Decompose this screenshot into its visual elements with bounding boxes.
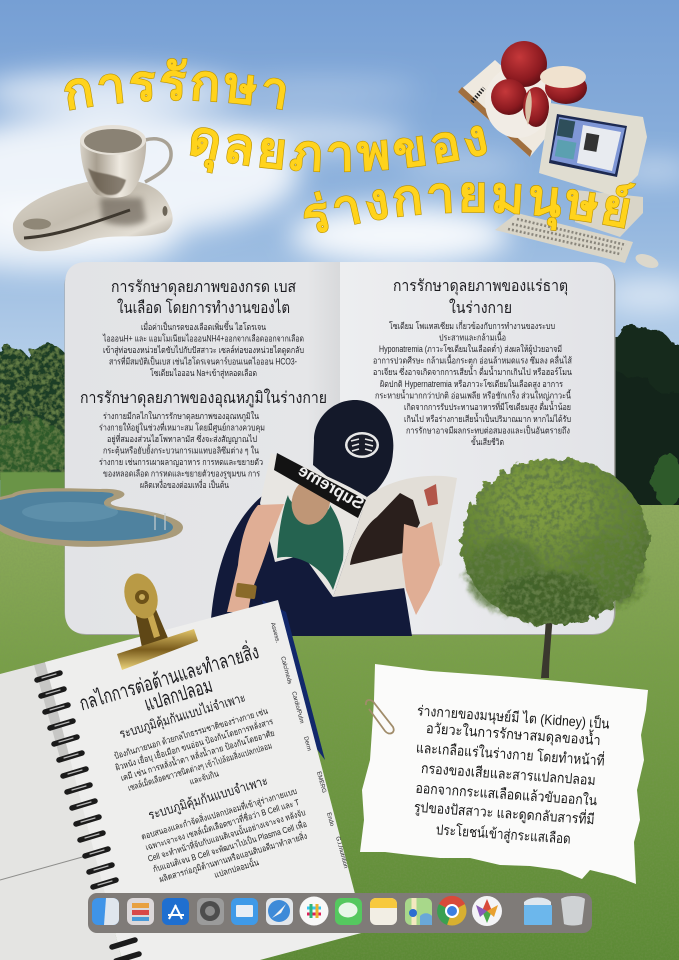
torn note card — [360, 664, 648, 884]
icon: settings — [197, 898, 224, 925]
icon: messages — [335, 898, 362, 925]
notebook tabs: Assess. — [269, 622, 280, 644]
spiral binding — [37, 673, 139, 960]
magazine left page: Supreme — [295, 461, 368, 513]
cap — [313, 400, 393, 503]
icon: slack — [300, 896, 328, 926]
open notebook panel — [64, 262, 616, 635]
heading: defense mechanisms: แปลกปลอม — [142, 675, 215, 716]
notebook tabs: EMERG — [315, 771, 327, 794]
notebook tabs: Endo — [325, 812, 335, 828]
icon: notes — [370, 898, 397, 925]
notebook tabs — [269, 622, 348, 869]
heading: defense mechanisms: กลไกการต่อต้านและทำลายสิ่ง — [76, 637, 262, 715]
note text: ประโยชน์เข้าสู่กระแสเลือด — [435, 821, 571, 848]
computer base — [575, 190, 643, 237]
heading: acid-base: การรักษาดุลยภาพของกรด เบส — [111, 279, 296, 297]
left page — [0, 662, 122, 960]
icon: finder — [92, 898, 119, 925]
text: minerals — [373, 320, 573, 447]
heading: acid-base: ในเลือด โดยการทำงานของไต — [117, 298, 290, 317]
cup and saucer — [13, 125, 173, 251]
text: adaptive immunity: Cell จะทำหน้าที่จับกับแอนติเจนนั้นอย่างเจาะจง หลังจับ — [146, 805, 307, 864]
text: innate immunity: เซลล์เม็ดเลือดขาวชนิดต่างๆ เข้าไปล้อมสิ่งแปลกปลอม — [126, 740, 273, 793]
retro computer — [495, 103, 660, 271]
body — [210, 485, 412, 636]
icon: launchpad — [127, 898, 154, 925]
text: temperature: ผลิตเหงื่อของต่อมเหงื่อ เป็นต้น — [140, 479, 229, 490]
text: temperature: ร่างกายให้อยู่ในช่วงที่เหมาะสม โดยมีศูนย์กลางควบคุม — [99, 422, 265, 434]
notebook text — [76, 637, 317, 903]
text: minerals: ขั้นเสียชีวิต — [471, 435, 504, 447]
text: acid-base: โซเดียมไอออน Na+เข้าสู่หลอดเลือด — [150, 368, 257, 379]
text: temperature: กระตุ้นหรือยับยั้งกระบวนการเมแทบอลิซึมต่าง ๆ ใน — [103, 444, 259, 456]
left hand and watch — [227, 504, 284, 612]
text: minerals: ผิดปกติ Hypernatremia หรือภาวะโซเดียมในเลือดสูง อาการ — [380, 379, 563, 390]
text: adaptive immunity: ตอบสนองและกำจัดสิ่งแปลกปลอมที่เข้าสู่ร่างกายแบบ — [140, 785, 298, 843]
icon: mail — [231, 898, 258, 925]
note text: รูปของปัสสาวะ และดูดกลับสารที่มี — [413, 798, 595, 828]
subheading: innate immunity: ระบบภูมิคุ้มกันแบบไม่จำเพาะ — [118, 690, 248, 742]
note text: ร่างกายของมนุษย์มี ไต (Kidney) เป็น — [416, 701, 611, 733]
note text: กรองของเสียและสารแปลกปลอม — [421, 760, 596, 788]
keyboard — [495, 213, 633, 263]
text: minerals: อาเจียน ซึ่งอาจเกิดจากการเสียน้ำ ดื่มน้ำมากเกินไป หรือฮอร์โมน — [373, 365, 572, 377]
text: innate immunity — [111, 705, 284, 806]
note text: และเกลือแร่ในร่างกาย โดยทำหน้าที่ — [416, 738, 605, 769]
text: acid-base — [102, 320, 304, 379]
grass field — [0, 505, 679, 960]
text: innate immunity: ผิวหนัง เยื่อบุ เยื่อเมือก ขนอ่อน ป้องกันโดยการหลั่งสาร — [114, 715, 275, 774]
background trees right — [606, 326, 679, 510]
text: adaptive immunity: แปลกปลอมนั้น — [212, 855, 260, 880]
text: adaptive immunity — [140, 784, 316, 897]
background trees left — [0, 345, 76, 508]
text: minerals: เกินไป หรือร่างกายเสียน้ำเป็นปริมาณมาก หากไม่ได้รับ — [404, 412, 571, 424]
notebook tabs: G.I./nutrition — [334, 836, 348, 869]
notebook tabs: Calc/meds — [279, 656, 292, 685]
text: minerals: ประสาทและกล้ามเนื้อ — [439, 330, 506, 342]
text: temperature: ร่างกาย เช่นการเผาผลาญอาหาร การหดและขยายตัว — [99, 457, 263, 467]
apples on tray — [458, 41, 587, 157]
paperclip — [366, 700, 394, 734]
icon: chrome — [437, 896, 466, 926]
text: acid-base: เมื่อค่าเป็นกรดของเลือดเพิ่มขึ้น ไฮโดรเจน — [141, 320, 266, 332]
heading: acid-base — [111, 279, 296, 317]
title: การรักษา — [64, 58, 286, 111]
swimming pool — [0, 488, 183, 547]
title: ดุลยภาพของ — [190, 125, 487, 174]
icon: trash — [561, 896, 585, 926]
text: temperature — [99, 411, 265, 490]
note text: อวัยวะในการรักษาสมดุลของน้ำ — [425, 718, 601, 749]
icon: folder — [524, 898, 552, 925]
text: minerals: Hyponatremia (ภาวะโซเดียมในเลือดต่ำ) ส่งผลให้ผู้ป่วยอาจมี — [379, 343, 562, 355]
text: minerals: กระหายน้ำมากกว่าปกติ อ่อนเพลีย หรือชักเกร็ง ส่วนใหญ่ภาวะนี้ — [375, 388, 572, 400]
icon: photos — [472, 896, 502, 926]
text: acid-base: สารที่มีสมบัติเป็นเบส เช่นไฮโดรเจนคาร์บอนเนตไอออน HCO3- — [109, 356, 297, 366]
monitor — [539, 103, 647, 197]
text: innate immunity: ป้องกันภายนอก ด้วยกลไกธรรมชาติของร่างกาย เช่น — [113, 706, 269, 761]
icon: app store — [162, 898, 189, 925]
binder clip — [117, 569, 198, 670]
text: temperature: ของหลอดเลือด การหดและขยายตัวของรูขุมขน การ — [103, 468, 260, 480]
tree — [461, 458, 649, 678]
right page — [45, 600, 365, 960]
text: minerals: อาการปวดศีรษะ กล้ามเนื้อกระตุก อ่อนล้าหมดแรง ซึมลง คลื่นไส้ — [373, 354, 573, 366]
navy cover edge — [262, 600, 325, 760]
text: minerals: เกิดจากการรับประทานอาหารที่มีโซเดียมสูง ดื่มน้ำน้อย — [404, 400, 571, 413]
text: temperature: ร่างกายมีกลไกในการรักษาดุลยภาพของอุณหภูมิใน — [103, 411, 259, 422]
text: innate immunity: เคมี เช่น การหลั่งน้ำตา หลั่งน้ำลาย ป้องกันโดยอาศัย — [119, 726, 276, 783]
heading: defense mechanisms — [76, 637, 267, 734]
text: minerals: การรักษาอาจมีผลกระทบต่อสมองและเป็นอันตรายถึง — [406, 424, 570, 436]
note text: ออกจากกระแสเลือดแล้วขับออกใน — [415, 780, 598, 808]
text: adaptive immunity: ผลิตสารก่อภูมิต้านทานหรือแอนติบอดีมาทำลายสิ่ง — [158, 830, 309, 885]
text: temperature: อยู่ที่สมองส่วนไฮโพทาลามัส ซึ่งจะส่งสัญญาณไป — [107, 433, 257, 445]
text: minerals: โซเดียม โพแทสเซียม เกี่ยวข้องกับการทำงานของระบบ — [389, 320, 555, 331]
text: innate immunity: และจับกิน — [188, 768, 220, 787]
heading: minerals — [393, 278, 568, 317]
notebook tabs: Derm — [302, 736, 312, 752]
sky background — [0, 0, 679, 360]
text: acid-base: ไอออนH+ และ แอมโมเนียมไอออนNH4+ออกจากเลือดออกจากเลือด — [102, 334, 304, 344]
heading: temperature: การรักษาดุลยภาพของอุณหภูมิในร่างกาย — [80, 388, 327, 408]
magazine right page — [333, 476, 457, 597]
icon: maps — [405, 898, 432, 925]
heading: minerals: ในร่างกาย — [449, 298, 512, 317]
text: acid-base: เข้าสู่ท่อของหน่วยไตขับไปกับปัสสาวะ เซลล์ท่อของหน่วยไตดูดกลับ — [103, 345, 304, 356]
screen — [549, 114, 627, 177]
notebook tabs: Cardio/Pulm — [290, 691, 304, 724]
mouse — [634, 251, 660, 271]
title — [64, 58, 636, 233]
note text — [413, 701, 611, 848]
spiral notebook — [0, 600, 365, 960]
subheading: adaptive immunity: ระบบภูมิคุ้มกันแบบจำเพาะ — [146, 773, 270, 824]
heading: minerals: การรักษาดุลยภาพของแร่ธาตุ — [393, 278, 568, 296]
app dock — [88, 893, 592, 933]
text: adaptive immunity: เฉพาะเจาะจง เซลล์เม็ดเลือดขาวที่ชื่อว่า B Cell และ T — [144, 796, 301, 852]
man reading magazine — [210, 400, 457, 636]
text: adaptive immunity: กับแอนติเจน B Cell จะพัฒนาไปเป็น Plasma Cell เพื่อ — [151, 818, 308, 874]
icon: safari — [266, 898, 293, 925]
magazine left page — [260, 453, 368, 597]
right hand — [402, 522, 440, 615]
title: ร่างกายมนุษย์ — [304, 182, 636, 233]
